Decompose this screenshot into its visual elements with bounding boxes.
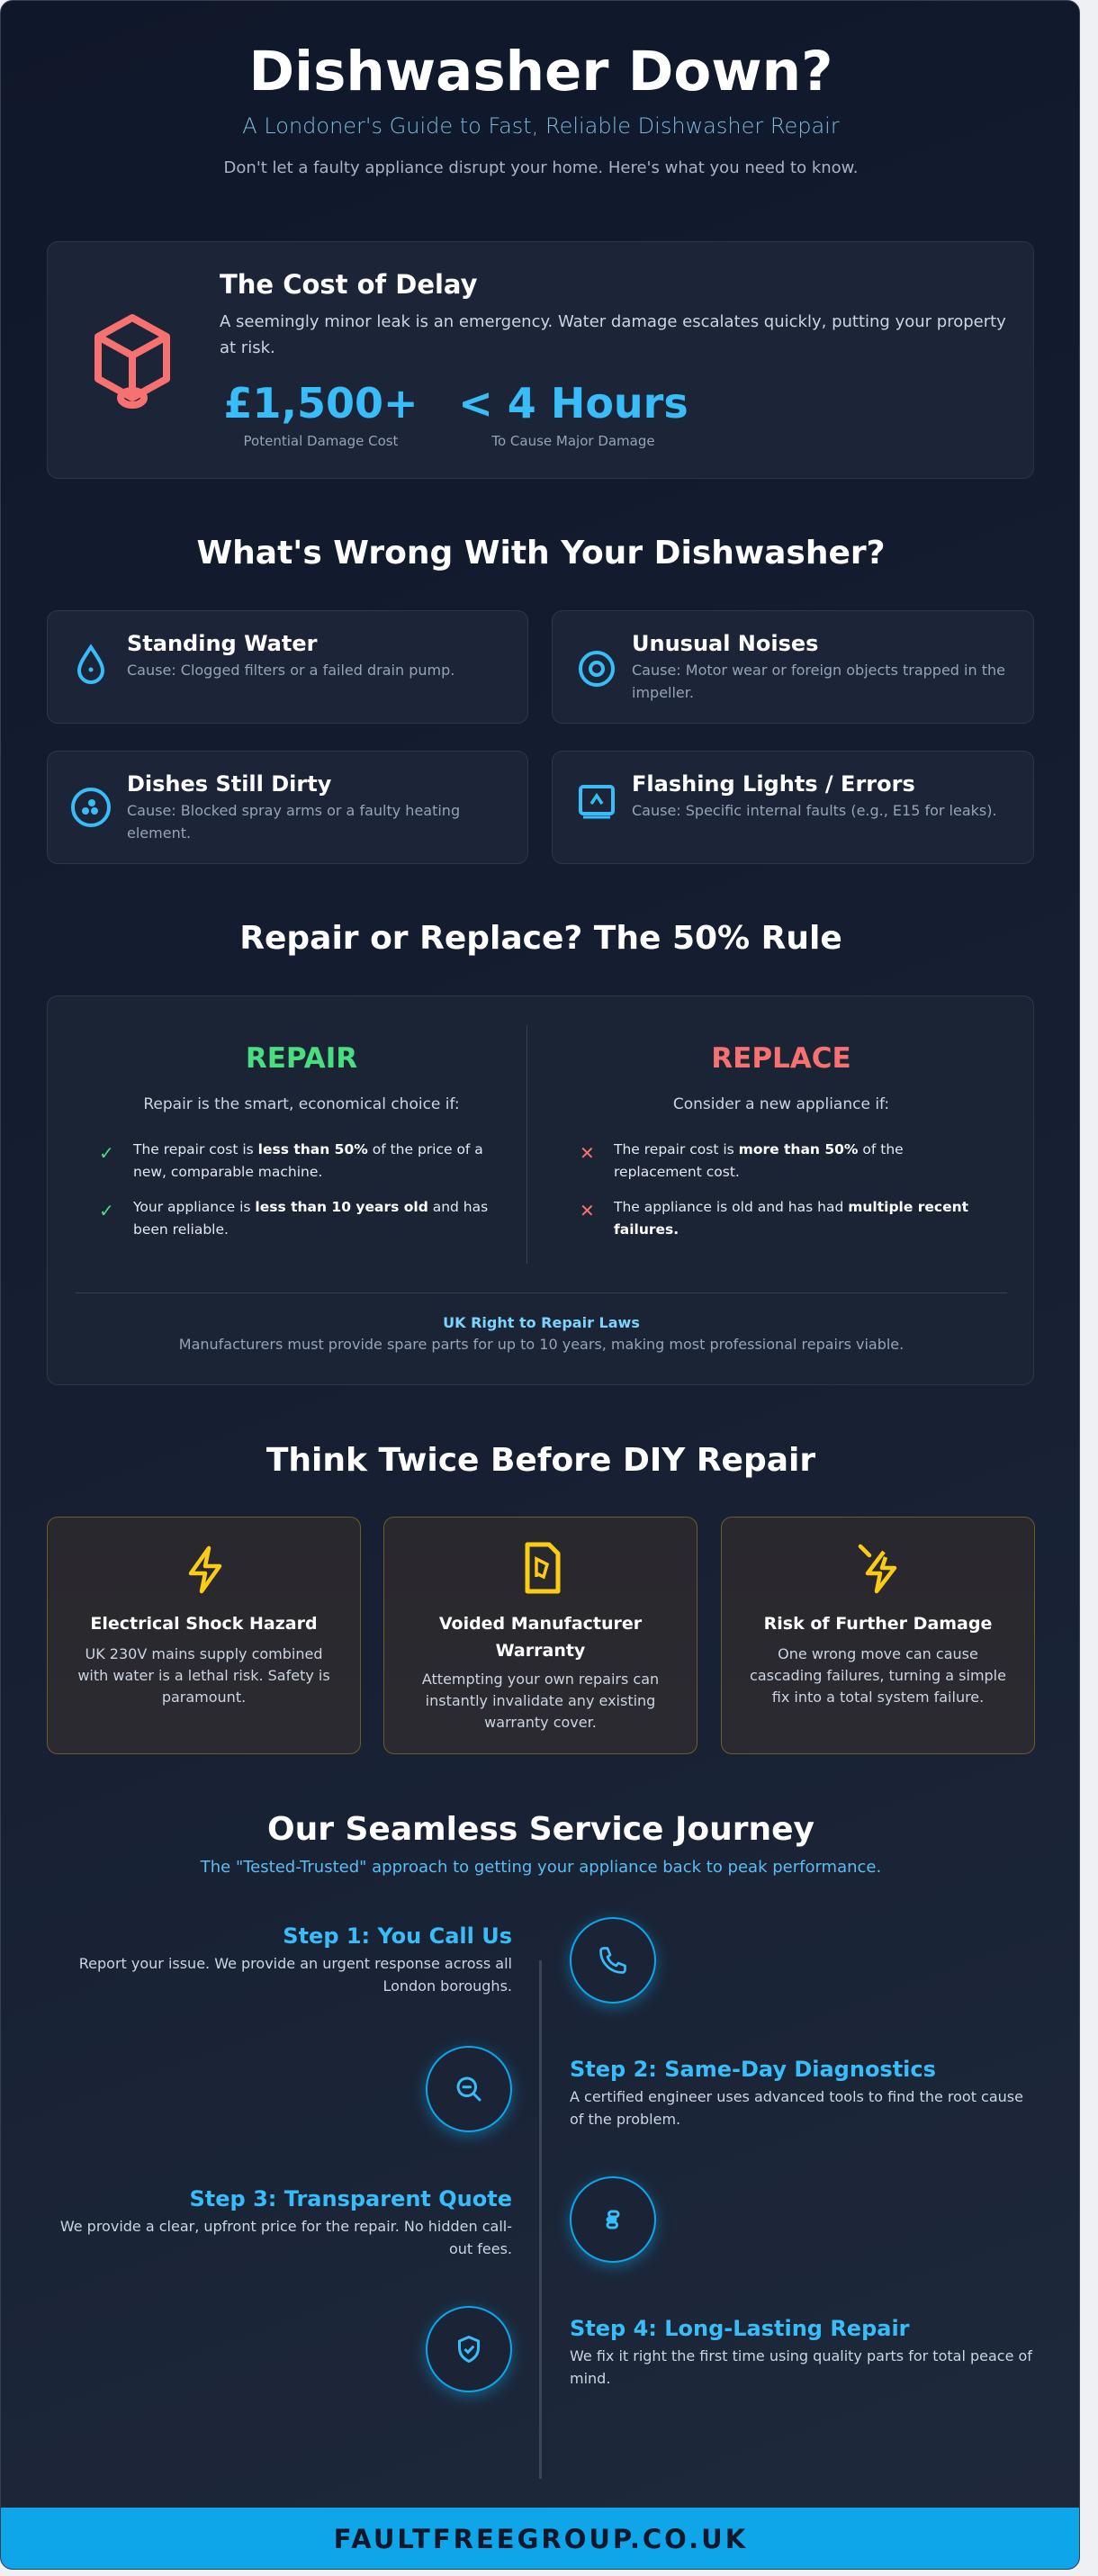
stat: cost: [223, 379, 418, 449]
column: repair: [99, 1042, 488, 1238]
panel: voided warranty: Attempting your own repairs can instantly invalidate any existing warranty cover.: [422, 1671, 659, 1731]
column: repair: The repair cost is less than 50% of the price of a new, comparable machine.: [133, 1141, 483, 1180]
step 3: We provide a clear, upfront price for the repair. No hidden call-out fees.: [60, 2218, 512, 2257]
step 1: Step 1: You Call Us: [283, 1923, 512, 1949]
panel: unusual noises: Unusual Noises: [632, 631, 818, 656]
step 4: Step 4: Long-Lasting Repair: [570, 2316, 910, 2341]
column: replace: The repair cost is more than 50% of the replacement cost.: [614, 1141, 904, 1180]
panel: further damage: Risk of Further Damage: [764, 1614, 992, 1634]
icon: box leak: [94, 314, 170, 409]
icon: check: ✓: [99, 1142, 114, 1164]
footer: [1, 2508, 1081, 2571]
panel: standing water: [47, 610, 528, 724]
stat: hours: < 4 Hours: [458, 379, 688, 428]
panel: unusual noises: Cause: Motor wear or foreign objects trapped in the impeller.: [632, 662, 1005, 701]
icon: drop: [77, 644, 104, 684]
icon: document: [526, 1543, 560, 1593]
panel: flashing lights: Cause: Specific internal faults (e.g., E15 for leaks).: [632, 802, 997, 819]
icon: spray: [71, 788, 111, 827]
column: replace: ✕: [580, 1200, 595, 1221]
panel: standing water: Cause: Clogged filters or a failed drain pump.: [127, 662, 454, 679]
text block: A seemingly minor leak is an emergency. Water damage escalates quickly, putting your property at risk.: [220, 312, 1006, 357]
panel: cost of delay: [47, 241, 1034, 479]
step 2: Step 2: Same-Day Diagnostics: [570, 2057, 936, 2082]
step 2: A certified engineer uses advanced tools to find the root cause of the problem.: [570, 2088, 1023, 2128]
heading: The Cost of Delay: [220, 269, 478, 300]
panel: flashing lights: Flashing Lights / Errors: [632, 771, 915, 797]
panel: flashing lights: [552, 751, 1034, 864]
column: replace: Consider a new appliance if:: [673, 1095, 889, 1113]
icon: target: [579, 651, 615, 687]
tagline: Don't let a faulty appliance disrupt your home. Here's what you need to know.: [224, 158, 858, 177]
icon: phone: [570, 1917, 656, 2004]
panel: voided warranty: [383, 1517, 698, 1754]
step 3: [60, 2172, 664, 2274]
column: replace: REPLACE: [711, 1042, 851, 1075]
heading: repair or replace: Repair or Replace? The 50% Rule: [239, 920, 842, 957]
step 1: Report your issue. We provide an urgent response across all London boroughs.: [79, 1955, 512, 1995]
step 4: [418, 2301, 1033, 2404]
icon: display: [579, 785, 615, 819]
panel: dishes dirty: [47, 751, 528, 864]
panel: shock hazard: UK 230V mains supply combined with water is a lethal risk. Safety is paramount.: [77, 1645, 330, 1706]
column: repair: REPAIR: [246, 1042, 357, 1075]
panel: dishes dirty: Cause: Blocked spray arms or a faulty heating element.: [127, 802, 460, 842]
footer: FAULTFREEGROUP.CO.UK: [334, 2524, 748, 2554]
icon: search: [426, 2046, 512, 2132]
panel: dishes dirty: Dishes Still Dirty: [127, 771, 331, 797]
stat: hours: To Cause Major Damage: [491, 433, 655, 449]
stat: hours: [458, 379, 688, 449]
column: replace: [580, 1042, 968, 1238]
column: repair: Your appliance is less than 10 years old and has been reliable.: [133, 1199, 488, 1238]
step 1: [79, 1913, 664, 2015]
stat: cost: £1,500+: [223, 379, 418, 428]
column: repair: ✓: [99, 1200, 114, 1221]
subtitle: journey: The "Tested-Trusted" approach to getting your appliance back to peak performance.: [201, 1858, 881, 1877]
step 2: [418, 2041, 1023, 2144]
panel: further damage: One wrong move can cause cascading failures, turning a simple fix into a total system failure.: [750, 1645, 1006, 1706]
title: Dishwasher Down?: [249, 40, 832, 104]
callout: right to repair: [179, 1314, 904, 1353]
column: replace: The appliance is old and has had multiple recent failures.: [614, 1199, 968, 1238]
column: repair: Repair is the smart, economical choice if:: [143, 1095, 460, 1113]
panel: repair vs replace: [47, 995, 1034, 1385]
callout: right to repair: Manufacturers must provide spare parts for up to 10 years, making most professional repairs viable.: [179, 1336, 904, 1353]
icon: coins: [570, 2176, 656, 2263]
panel: shock hazard: Electrical Shock Hazard: [90, 1614, 318, 1634]
subtitle: A Londoner's Guide to Fast, Reliable Dishwasher Repair: [242, 113, 840, 139]
panel: further damage: [721, 1517, 1035, 1754]
stat: cost: Potential Damage Cost: [244, 433, 398, 449]
panel: voided warranty: Voided Manufacturer Warranty: [439, 1614, 642, 1661]
icon: broken bolt: [859, 1545, 896, 1593]
step 3: Step 3: Transparent Quote: [189, 2186, 512, 2211]
icon: cross: ✕: [580, 1142, 595, 1164]
icon: shield: [426, 2306, 512, 2392]
panel: unusual noises: [552, 610, 1034, 724]
panel: standing water: Standing Water: [127, 631, 317, 656]
icon: bolt: [189, 1546, 221, 1593]
heading: what's wrong: What's Wrong With Your Dishwasher?: [196, 535, 886, 572]
step 4: We fix it right the first time using quality parts for total peace of mind.: [570, 2347, 1032, 2387]
callout: right to repair: UK Right to Repair Laws: [443, 1314, 640, 1331]
panel: shock hazard: [47, 1517, 361, 1754]
heading: DIY: Think Twice Before DIY Repair: [266, 1442, 815, 1479]
heading: service journey: Our Seamless Service Journey: [267, 1811, 814, 1848]
